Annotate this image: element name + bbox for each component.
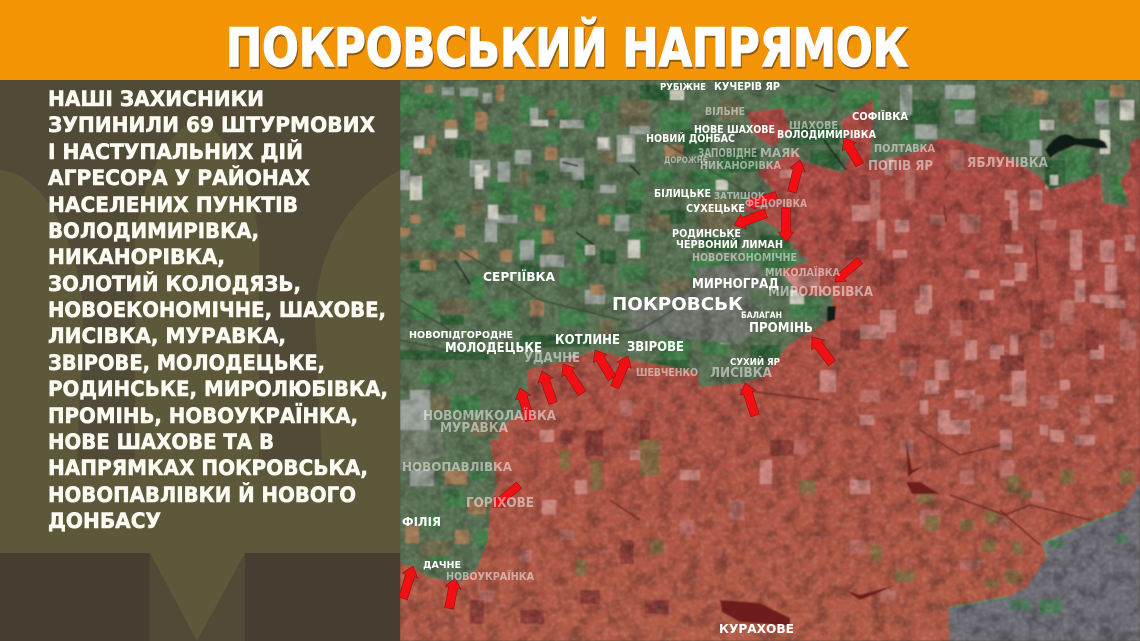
sidebar text block: НОВОЕКОНОМІЧНЕ, ШАХОВЕ,: [48, 298, 386, 323]
label: Миколаївка: МИКОЛАЇВКА: [765, 265, 840, 279]
sidebar text block: ЗВІРОВЕ, МОЛОДЕЦЬКЕ,: [48, 351, 325, 376]
label: Полтавка: ПОЛТАВКА: [874, 142, 935, 155]
label: Балаган: БАЛАГАН: [741, 311, 782, 321]
label: Філія: ФІЛІЯ: [402, 515, 441, 529]
label: Шахове: ШАХОВЕ: [789, 119, 838, 132]
Pokrovsk urban area: [625, 285, 760, 345]
arrow: Котлине: [588, 346, 619, 382]
arrow: Удачне east: [556, 360, 589, 398]
label: Рубіжне: РУБІЖНЕ: [660, 82, 706, 93]
label: Сухий Яр: СУХИЙ ЯР: [730, 355, 780, 368]
sidebar text block: РОДИНСЬКЕ, МИРОЛЮБІВКА,: [48, 377, 388, 402]
arrow: Сухецьке: [731, 206, 769, 233]
arrow: Червоний Лиман: [778, 208, 794, 242]
label: Володимирівка: ВОЛОДИМИРІВКА: [777, 128, 876, 141]
label: Родинське: РОДИНСЬКЕ: [672, 227, 741, 240]
label: Яблунівка: ЯБЛУНІВКА: [967, 156, 1048, 171]
label: Федорівка: ФЕДОРІВКА: [745, 197, 807, 210]
label: Новоукраїнка: НОВОУКРАЇНКА: [446, 569, 534, 583]
label: Попів Яр: ПОПІВ ЯР: [868, 159, 933, 174]
arrow: Софіївка: [837, 134, 867, 169]
label: Червоний Лиман: ЧЕРВОНИЙ ЛИМАН: [676, 238, 783, 251]
sidebar text block: [48, 87, 388, 534]
label: Курахове: КУРАХОВЕ: [719, 622, 794, 636]
sidebar text block: НОВЕ ШАХОВЕ ТА В: [48, 430, 274, 455]
water bodies: [1045, 134, 1108, 158]
map labels: settlements under Ukrainian control and front line: [402, 80, 1048, 636]
label: Вільне: ВІЛЬНЕ: [705, 105, 745, 118]
arrow: Лисівка: [737, 381, 763, 418]
arrow: Звірове: [607, 353, 635, 390]
label: Лисівка: ЛИСІВКА: [710, 366, 772, 381]
label: Новий Донбас: НОВИЙ ДОНБАС: [646, 132, 735, 145]
label: Кучерів Яр: КУЧЕРІВ ЯР: [714, 80, 780, 93]
label: Промінь: ПРОМІНЬ: [749, 321, 813, 336]
label: Новомиколаївка: НОВОМИКОЛАЇВКА: [423, 408, 556, 424]
sidebar text block: НИКАНОРІВКА,: [48, 245, 225, 270]
label: Нове Шахове: НОВЕ ШАХОВЕ: [694, 123, 775, 136]
sidebar text block: НАПРЯМКАХ ПОКРОВСЬКА,: [48, 456, 368, 481]
sidebar text block: ЗОЛОТИЙ КОЛОДЯЗЬ,: [48, 271, 301, 297]
label: Муравка: МУРАВКА: [440, 421, 508, 436]
label: Молодецьке: МОЛОДЕЦЬКЕ: [445, 341, 542, 356]
label: Новопавлівка: НОВОПАВЛІВКА: [402, 460, 513, 474]
label: Дорожнє: ДОРОЖНЄ: [664, 156, 708, 166]
sidebar text block: НАСЕЛЕНИХ ПУНКТІВ: [48, 193, 298, 218]
arrow: Федорівка: [743, 189, 779, 212]
label: Заповідне: ЗАПОВІДНЕ: [698, 146, 757, 160]
label: Покровськ: ПОКРОВСЬК: [612, 294, 743, 315]
sidebar text block: І НАСТУПАЛЬНИХ ДІЙ: [48, 139, 303, 165]
sidebar text block: ВОЛОДИМИРІВКА,: [48, 219, 259, 244]
sidebar text block: НАШІ ЗАХИСНИКИ: [48, 87, 264, 112]
label: Затишок: ЗАТИШОК: [714, 191, 766, 202]
label: Дачне: ДАЧНЕ: [423, 560, 461, 571]
arrow: Удачне centre: [534, 368, 561, 406]
label: Горіхове: ГОРІХОВЕ: [466, 496, 534, 511]
arrow: Дачне: [395, 564, 421, 601]
arrow: Новоукраїнка: [441, 576, 463, 610]
label: Звірове: ЗВІРОВЕ: [627, 340, 684, 355]
arrow: Миколаївка: [830, 255, 864, 287]
label: Сухецьке: СУХЕЦЬКЕ: [686, 202, 745, 215]
label: Сергіївка: СЕРГІЇВКА: [483, 269, 556, 284]
label: Шевченко: ШЕВЧЕНКО: [636, 366, 698, 379]
label: Новопідгородне: НОВОПІДГОРОДНЕ: [409, 330, 513, 341]
label: Софіївка: СОФІЇВКА: [852, 109, 908, 123]
sidebar text block: НОВОПАВЛІВКИ Й НОВОГО: [48, 482, 356, 508]
label: Мирноград: МИРНОГРАД: [692, 277, 779, 292]
sidebar text block: ПРОМІНЬ, НОВОУКРАЇНКА,: [48, 403, 358, 429]
label: Никанорівка: НИКАНОРІВКА: [700, 159, 781, 172]
terrain texture: [400, 80, 1140, 641]
panel: satellite map: [395, 80, 1140, 641]
sidebar text block: ЗУПИНИЛИ 69 ШТУРМОВИХ: [48, 113, 375, 138]
arrow: Володимирівка: [784, 158, 808, 194]
sidebar text block: АГРЕСОРА У РАЙОНАХ: [48, 165, 310, 191]
arrow: Промінь: [806, 332, 838, 368]
label: Білицьке: БІЛИЦЬКЕ: [654, 187, 711, 200]
label: Котлине: КОТЛИНЕ: [555, 333, 620, 348]
header bar: [0, 0, 1140, 80]
sidebar text block: ДОНБАСУ: [48, 509, 161, 534]
attack arrows: [395, 134, 867, 610]
arrow: Удачне west: [512, 386, 538, 423]
panel: text sidebar: [0, 80, 400, 641]
label: Новоекономічне: НОВОЕКОНОМІЧНЕ: [692, 251, 797, 264]
Kurakhove city: [948, 483, 1140, 641]
occupied territory: [400, 80, 1140, 641]
label: Миролюбівка: МИРОЛЮБІВКА: [768, 285, 873, 300]
sidebar text block: ЛИСІВКА, МУРАВКА,: [48, 324, 286, 349]
title: ПОКРОВСЬКИЙ НАПРЯМОК: [226, 16, 908, 79]
trident emblem background: [0, 118, 400, 641]
arrow: Горіхове: [489, 480, 524, 512]
label: Удачне: УДАЧНЕ: [524, 351, 580, 366]
label: Маяк: МАЯК: [760, 146, 800, 160]
